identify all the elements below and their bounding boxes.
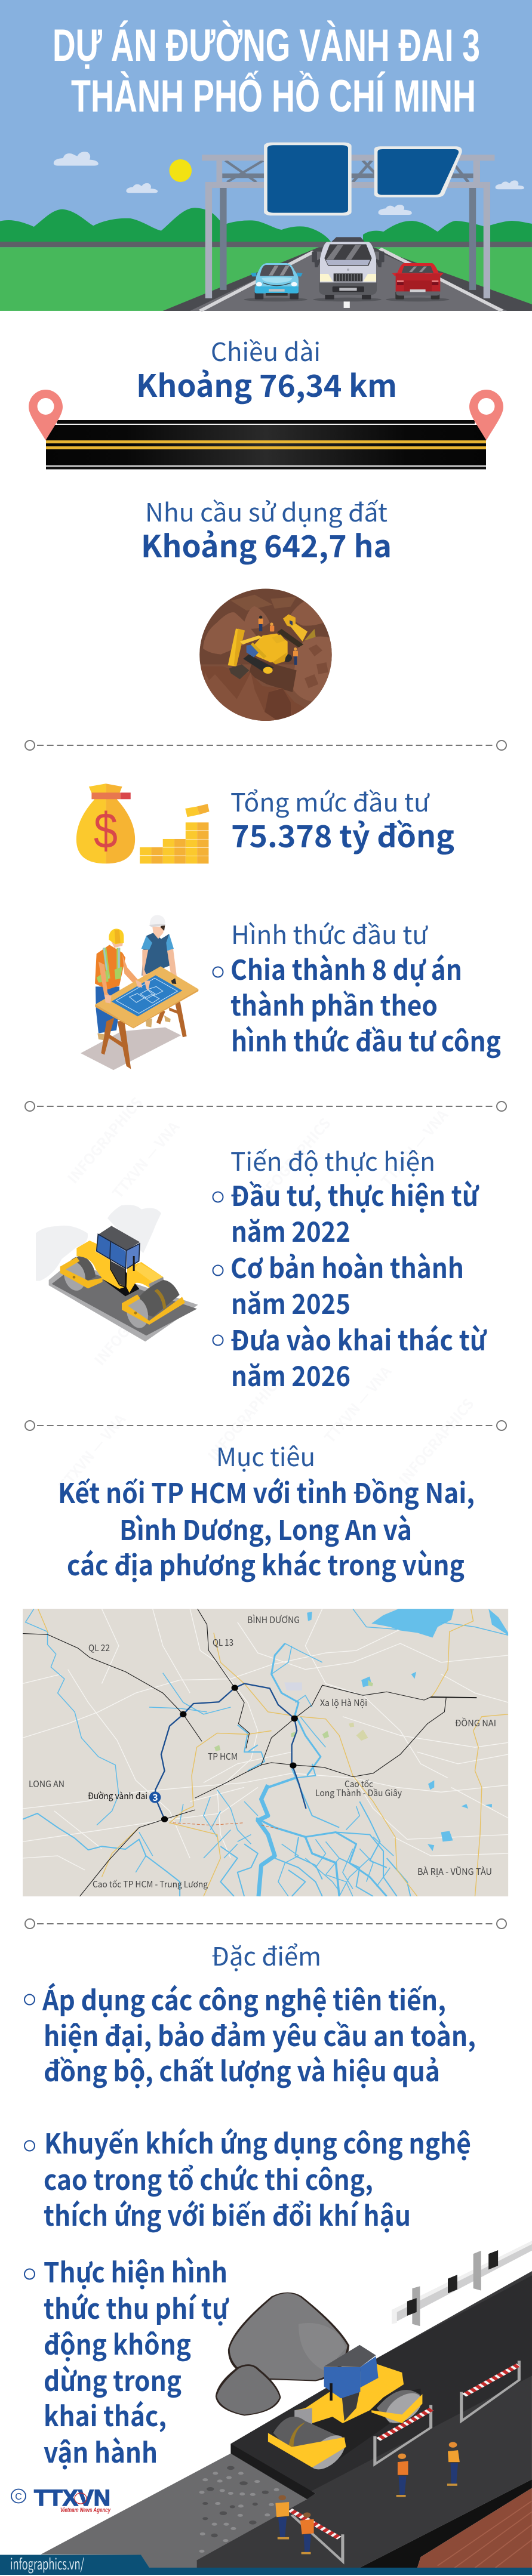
bottom illustration	[41, 2241, 532, 2568]
icon: sun	[170, 159, 192, 182]
table	[95, 966, 198, 1069]
map labels: BÀ RỊA - VŨNG TÀU	[417, 1865, 492, 1878]
bullet text: high technology: thích ứng với biến đổi khí hậu	[44, 2195, 411, 2234]
bullet text: operate 2026: Đưa vào khai thác từ	[230, 1319, 487, 1359]
bullet text: start 2022	[213, 1175, 479, 1250]
value: Khoảng 642,7 ha: Khoảng 642,7 ha	[141, 522, 392, 566]
heading: Hình thức đầu tư: Hình thức đầu tư	[231, 915, 429, 952]
bullet text: start 2022: Đầu tư, thực hiện từ	[230, 1175, 479, 1214]
gantry	[202, 155, 494, 298]
watermarks: TTXVN — VNA	[319, 1361, 395, 1446]
title	[53, 20, 480, 122]
map base	[23, 1609, 508, 1896]
asphalt road	[197, 2271, 532, 2568]
objective text: các địa phương khác trong vùng	[67, 1544, 465, 1584]
rivers	[23, 1609, 508, 1896]
logo: TTXVN: C	[15, 2492, 22, 2502]
section: features	[24, 1937, 476, 2471]
guardrail	[392, 2241, 532, 2326]
road	[163, 247, 532, 311]
footer bar: infographics.vn/	[10, 2553, 84, 2574]
icon: road sign right	[374, 146, 462, 198]
section: land use	[141, 493, 392, 724]
objective text	[58, 1472, 475, 1584]
bullet text: technology: Áp dụng các công nghệ tiên tiến,	[42, 1979, 446, 2019]
icon: money bag and coins: $	[94, 803, 118, 859]
highways	[38, 1609, 508, 1896]
worker with helmet	[95, 928, 142, 1034]
map labels: Cao tốc TP HCM - Trung Lương	[93, 1878, 208, 1890]
watermarks: TTXVN — VNA	[376, 1104, 452, 1190]
value: 75.378 tỷ đồng: 75.378 tỷ đồng	[231, 812, 454, 856]
earth	[359, 2479, 532, 2568]
watermarks: TTXVN — VNA	[107, 1116, 183, 1202]
bullet text: high technology: Khuyến khích ứng dụng công nghệ	[44, 2122, 471, 2162]
map labels: LONG AN	[29, 1778, 64, 1790]
heading: Tổng mức đầu tư: Tổng mức đầu tư	[230, 783, 430, 819]
map labels	[29, 1614, 496, 1890]
section: objective	[58, 1437, 475, 1584]
bullet text: toll	[24, 2251, 229, 2471]
objective text: Kết nối TP HCM với tỉnh Đồng Nai,	[58, 1472, 475, 1511]
bullet text: toll: thức thu phí tự	[44, 2288, 229, 2327]
icon: red car	[386, 263, 450, 301]
section: total investment	[76, 783, 454, 863]
illustration: excavator in circle	[197, 589, 334, 724]
bullet text: toll: động không	[44, 2324, 191, 2363]
divider 4	[25, 1919, 506, 1929]
bullet text: toll: Thực hiện hình	[44, 2251, 227, 2291]
divider 3	[25, 1421, 506, 1430]
road bar	[46, 420, 486, 470]
illustration: engineers at table	[81, 915, 198, 1070]
watermarks: INFOGRAPHICS	[393, 1393, 478, 1488]
minor roads	[23, 1609, 508, 1870]
watermarks: INFOGRAPHICS	[89, 1274, 173, 1369]
heading: Tiến độ thực hiện: Tiến độ thực hiện	[230, 1142, 435, 1179]
gravel	[199, 2466, 279, 2553]
logo: TTXVN: TTXVN	[34, 2486, 110, 2511]
watermarks: INFOGRAPHICS	[202, 1369, 287, 1464]
map labels: BÌNH DƯƠNG	[247, 1614, 300, 1626]
bullet text: component projects: thành phần theo	[230, 985, 438, 1024]
front roller	[137, 1280, 180, 1317]
grille	[149, 1277, 164, 1292]
watermarks: INFOGRAPHICS	[250, 1113, 334, 1208]
logo: TTXVN: Vietnam News Agency	[60, 2507, 111, 2514]
map labels: Đường vành đai	[88, 1790, 147, 1802]
bullet text: component projects: hình thức đầu tư công	[231, 1020, 501, 1060]
icon: right pin	[469, 390, 503, 440]
bullet text: technology: đồng bộ, chất lượng và hiệu quả	[44, 2050, 440, 2090]
airport	[284, 1682, 302, 1690]
sky	[0, 0, 532, 310]
bullet text: component projects: Chia thành 8 dự án	[230, 949, 462, 988]
hills	[0, 208, 532, 242]
map	[23, 1609, 508, 1896]
bullet text: toll: vận hành	[44, 2432, 158, 2471]
icon: money bag and coins	[76, 783, 210, 863]
heading: Đặc điểm: Đặc điểm	[211, 1937, 321, 1973]
objective text: Bình Dương, Long An và	[119, 1509, 412, 1548]
map labels: 3	[152, 1790, 158, 1804]
section: investment form	[81, 915, 501, 1070]
divider 2	[25, 1102, 506, 1111]
heading: Nhu cầu sử dụng đất: Nhu cầu sử dụng đất	[145, 493, 388, 529]
watermarks: INFOGRAPHICS	[62, 1092, 146, 1187]
bullet text: technology	[24, 1979, 476, 2090]
green field	[0, 247, 532, 311]
bullet text: technology: hiện đại, bảo đảm yêu cầu an toàn,	[44, 2015, 476, 2054]
black project roads	[23, 1609, 476, 1896]
map labels: Long Thành - Dầu Giây	[315, 1787, 402, 1799]
excavator	[228, 628, 292, 679]
bullet text: toll: khai thác,	[44, 2395, 167, 2435]
logo: TTXVN	[11, 2486, 111, 2514]
worker with white helmet	[142, 915, 177, 989]
cab	[97, 1234, 126, 1268]
icon: left pin	[29, 390, 63, 440]
workers	[259, 616, 298, 665]
bulldozer	[277, 614, 316, 647]
bullet text: component projects	[213, 949, 501, 1060]
illustration: road roller	[36, 1205, 198, 1341]
roller	[268, 2345, 429, 2473]
divider 1	[25, 741, 506, 750]
interchange nodes	[161, 1685, 298, 1822]
section: length	[29, 332, 503, 470]
section: schedule	[36, 1142, 487, 1395]
ring road 3	[155, 1683, 306, 1819]
gravel piles	[216, 2293, 349, 2415]
bullet text: complete 2025	[213, 1247, 464, 1322]
map labels: QL 13	[213, 1636, 233, 1649]
value: Khoảng 76,34 km: Khoảng 76,34 km	[136, 362, 397, 406]
bullet text: operate 2026: năm 2026	[231, 1355, 350, 1395]
map labels: ĐỒNG NAI	[455, 1717, 496, 1729]
bullet text: toll: dừng trong	[44, 2360, 182, 2399]
icon: clouds	[54, 152, 524, 215]
barriers	[290, 2361, 519, 2561]
parks	[214, 1680, 373, 1751]
hero banner	[0, 0, 532, 311]
map labels: TP HCM	[208, 1750, 238, 1763]
cars	[244, 237, 450, 301]
fresh asphalt	[230, 2275, 532, 2493]
bullet text: start 2022: năm 2022	[231, 1211, 350, 1250]
watermarks	[53, 1092, 478, 1494]
icon: blue car	[244, 263, 307, 301]
bullet text: high technology	[24, 2122, 471, 2234]
heading: Mục tiêu: Mục tiêu	[216, 1437, 315, 1474]
map labels: QL 22	[88, 1642, 110, 1654]
rear roller	[67, 1256, 96, 1284]
heading: Chiều dài: Chiều dài	[211, 332, 321, 369]
watermarks: TTXVN — VNA	[53, 1408, 130, 1494]
icon: road sign left	[264, 143, 352, 215]
bullet text: complete 2025: năm 2025	[231, 1283, 350, 1322]
bullet text: complete 2025: Cơ bản hoàn thành	[230, 1247, 464, 1287]
map labels: Cao tốc	[345, 1778, 373, 1790]
body	[103, 1270, 139, 1296]
bullet text: operate 2026	[213, 1319, 487, 1395]
bullet text: high technology: cao trong tổ chức thi công,	[44, 2159, 373, 2198]
horizon band	[0, 242, 532, 247]
icon: silver truck	[312, 237, 385, 301]
lakes	[307, 1609, 508, 1851]
hero landscape drawn in zoom coordinates	[0, 143, 532, 311]
workers	[275, 2442, 460, 2554]
footer bar	[0, 2553, 532, 2575]
ring road badge	[149, 1792, 161, 1803]
gravel strip	[41, 2454, 315, 2568]
map labels: Xa lộ Hà Nội	[320, 1696, 367, 1709]
